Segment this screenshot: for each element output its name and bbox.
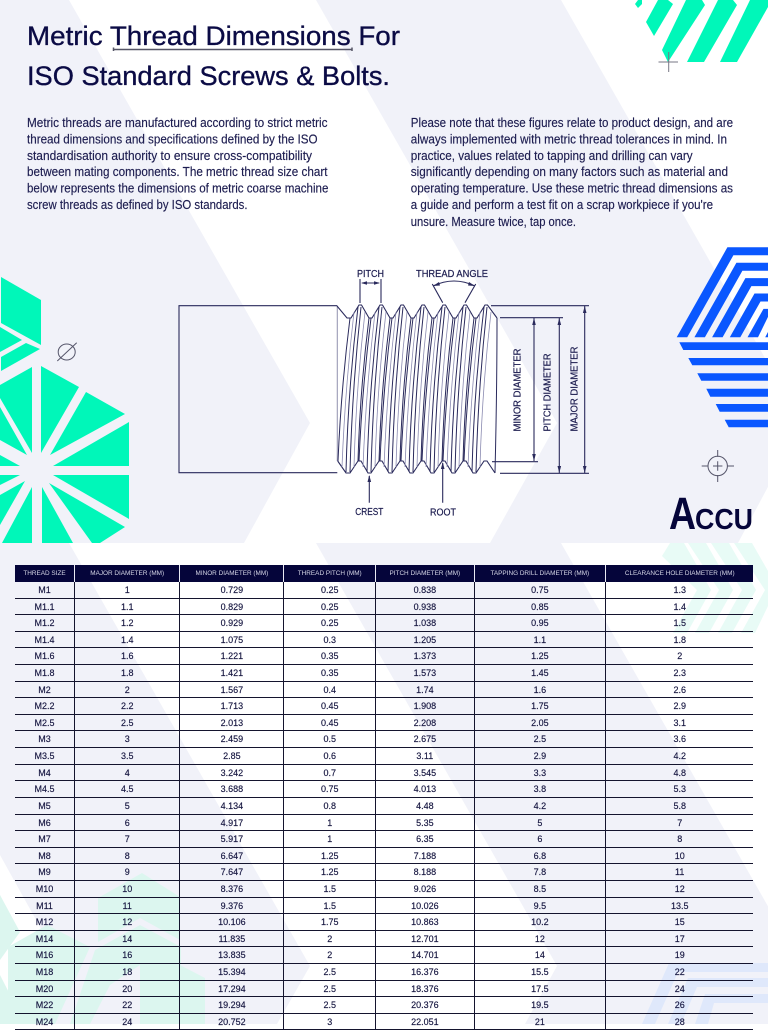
row M1.1	[15, 599, 753, 615]
faded mint hexagon	[0, 873, 205, 1024]
row M1.6: 1.6	[121, 651, 133, 661]
Accu logo	[669, 488, 753, 539]
row M24: 3	[327, 1017, 332, 1027]
title	[27, 21, 400, 91]
row M1: 1	[125, 585, 130, 595]
row M3.5: 3.11	[416, 751, 433, 761]
row M1.8: 1.421	[221, 668, 243, 678]
row M3: 3.6	[673, 734, 686, 744]
row M2: 0.4	[323, 685, 336, 695]
row M1: 0.729	[221, 585, 243, 595]
row M2: 1.567	[221, 685, 243, 695]
row M3.5: 3.5	[121, 751, 133, 761]
row M9: 7.647	[221, 867, 243, 877]
title: ISO Standard Screws & Bolts.	[27, 61, 390, 91]
row M3: 3	[125, 734, 130, 744]
row M9: 9	[125, 867, 130, 877]
row M18: 16.376	[411, 967, 439, 977]
row M9: 8.188	[414, 867, 436, 877]
row M1.1: M1.1	[34, 602, 54, 612]
row M16: 13.835	[218, 950, 246, 960]
row M7: 7	[125, 834, 130, 844]
row M6: M6	[38, 818, 51, 828]
row M1.8	[15, 665, 753, 682]
table header: THREAD SIZE	[23, 570, 66, 577]
row M24: 22.051	[411, 1017, 439, 1027]
crest and root leader lines	[369, 463, 443, 503]
row M9: 1.25	[321, 867, 338, 877]
row M2.5: 0.45	[321, 718, 338, 728]
row M2: M2	[38, 685, 51, 695]
row M10: M10	[36, 884, 53, 894]
diagram labels: MAJOR DIAMETER	[570, 346, 580, 432]
row M8: 6.647	[221, 851, 243, 861]
row M2.2	[15, 698, 753, 715]
row M20: 24	[675, 984, 685, 994]
row M7: 6	[537, 834, 542, 844]
row M18: 15.5	[531, 967, 549, 977]
row M2	[15, 682, 753, 698]
row M5: 0.8	[323, 801, 336, 811]
row M1.8: 2.3	[673, 668, 686, 678]
row M22: 22	[122, 1000, 132, 1010]
diagram labels: PITCH	[357, 269, 384, 280]
row M1.2: 1.5	[673, 618, 686, 628]
row M20: M20	[36, 984, 53, 994]
row M10: 12	[675, 884, 685, 894]
row M8: 7.188	[414, 851, 436, 861]
intro text right: practice, values related to tapping and drilling can vary	[411, 149, 693, 163]
table header: THREAD PITCH (MM)	[298, 570, 362, 577]
row M6: 6	[125, 818, 130, 828]
row M12: 10.2	[531, 917, 549, 927]
diagram labels: MINOR DIAMETER	[512, 348, 524, 432]
row M2: 2	[125, 685, 130, 695]
row M2.2: 0.45	[321, 701, 338, 711]
row M10: 10	[122, 884, 132, 894]
row M5: 5	[125, 801, 130, 811]
row M10: 8.5	[534, 884, 546, 894]
diagram labels	[355, 269, 580, 518]
row M1.4: 1.1	[534, 635, 546, 645]
row M10	[15, 881, 753, 898]
row M22: 26	[675, 1000, 685, 1010]
row M2.5: 2.208	[414, 718, 436, 728]
row M4.5: 0.75	[321, 784, 338, 794]
row M8: M8	[38, 851, 51, 861]
row M2.5: 2.013	[221, 718, 243, 728]
row M11: 11	[123, 901, 132, 911]
row M1: 1.3	[673, 585, 686, 595]
row M1.1: 0.25	[321, 602, 338, 612]
row M18: M18	[36, 967, 53, 977]
row M22: 2.5	[323, 1000, 336, 1010]
row M8: 6.8	[534, 851, 546, 861]
row M11: 9.376	[221, 901, 243, 911]
Accu logo: CCU	[695, 504, 753, 536]
row M2.5: 3.1	[673, 718, 686, 728]
intro text left: below represents the dimensions of metric coarse machine	[27, 182, 328, 196]
row M1.6: 1.373	[414, 651, 436, 661]
mint hexagon wheel left	[0, 277, 129, 543]
table header: PITCH DIAMETER (MM)	[390, 570, 460, 577]
row M1.4: 0.3	[323, 635, 336, 645]
dimension extension lines	[491, 306, 589, 473]
mint stripes top right	[635, 0, 768, 62]
thread angle bracket	[432, 281, 476, 303]
intro text left: standardisation authority to ensure cross-compatibility	[27, 149, 313, 163]
row M4: M4	[38, 768, 51, 778]
row M9: 7.8	[534, 867, 546, 877]
row M2: 1.74	[416, 685, 434, 695]
helix lines	[338, 307, 497, 473]
row M6: 1	[327, 818, 332, 828]
row M1.4: M1.4	[34, 635, 54, 645]
row M10: 8.376	[221, 884, 243, 894]
metric thread size table	[15, 565, 753, 1030]
row M1: M1	[38, 585, 51, 595]
row M20: 17.5	[531, 984, 549, 994]
row M2.2: M2.2	[34, 701, 54, 711]
row M3.5: 0.6	[323, 751, 336, 761]
row M16	[15, 947, 753, 964]
row M18: 15.394	[218, 967, 246, 977]
row M10: 1.5	[323, 884, 336, 894]
row M1.6: M1.6	[34, 651, 54, 661]
row M11: 9.5	[534, 901, 546, 911]
row M2.2: 1.713	[221, 701, 243, 711]
secondary helix lines	[342, 312, 491, 467]
row M1.2: 0.929	[221, 618, 243, 628]
row M1.8: 0.35	[321, 668, 338, 678]
row M1.4: 1.205	[414, 635, 436, 645]
row M14: 2	[327, 934, 332, 944]
row M5: 4.134	[221, 801, 243, 811]
row M24: M24	[36, 1017, 53, 1027]
row M2.5: M2.5	[34, 718, 54, 728]
row M3.5	[15, 748, 753, 765]
row M14: M14	[36, 934, 53, 944]
row M24: 24	[122, 1017, 132, 1027]
row M4.5: 3.8	[534, 784, 546, 794]
row M7: M7	[38, 834, 51, 844]
row M7: 5.917	[221, 834, 243, 844]
row M6: 5	[537, 818, 542, 828]
diagram labels: CREST	[355, 507, 383, 518]
row M9	[15, 864, 753, 881]
row M1.6: 2	[677, 651, 682, 661]
row M12: 10.106	[218, 917, 246, 927]
row M9: M9	[38, 867, 51, 877]
row M24: 21	[535, 1017, 545, 1027]
row M24: 28	[675, 1017, 685, 1027]
row M2: 2.6	[673, 685, 686, 695]
row M2.5: 2.05	[531, 718, 549, 728]
row M3: 2.5	[534, 734, 546, 744]
row M5: 4.2	[534, 801, 546, 811]
row M22: 19.294	[218, 1000, 246, 1010]
intro text left: Metric threads are manufactured according to strict metric	[27, 116, 328, 130]
title: Metric Thread Dimensions For	[27, 21, 400, 51]
row M3.5: 2.9	[534, 751, 546, 761]
row M1.2: 1.2	[121, 618, 133, 628]
row M1.6: 1.25	[531, 651, 549, 661]
row M18: 22	[675, 967, 685, 977]
intro text left: between mating components. The metric thread size chart	[27, 165, 328, 179]
row M1.6: 0.35	[321, 651, 338, 661]
row M3	[15, 731, 753, 748]
row M20: 17.294	[218, 984, 246, 994]
row M22: 20.376	[411, 1000, 439, 1010]
row M16: 19	[675, 950, 685, 960]
row M1.2	[15, 615, 753, 632]
row M1.4: 1.8	[673, 635, 686, 645]
row M14	[15, 931, 753, 947]
row M20: 20	[122, 984, 132, 994]
row M22: 19.5	[531, 1000, 549, 1010]
diagram labels: THREAD ANGLE	[416, 269, 488, 280]
row M24	[15, 1014, 753, 1030]
row M1.1: 0.829	[221, 602, 243, 612]
row M20	[15, 981, 753, 997]
row M1.2: 1.038	[414, 618, 436, 628]
target icon	[702, 450, 734, 482]
row M6: 5.35	[416, 818, 434, 828]
row M18: 2.5	[323, 967, 336, 977]
row M3: 0.5	[323, 734, 336, 744]
faded blue stripes	[642, 963, 768, 1024]
row M1.4: 1.075	[221, 635, 243, 645]
row M2.2: 2.9	[673, 701, 686, 711]
row M7: 1	[327, 834, 332, 844]
diagram labels: PITCH DIAMETER	[542, 354, 554, 432]
row M18: 18	[122, 967, 132, 977]
row M24: 20.752	[218, 1017, 246, 1027]
row M16: 2	[327, 950, 332, 960]
row M11: 1.5	[323, 901, 336, 911]
row M20: 18.376	[411, 984, 439, 994]
table header: MINOR DIAMETER (MM)	[196, 570, 268, 577]
row M1: 0.838	[414, 585, 436, 595]
shank end line	[336, 306, 338, 461]
row M3: M3	[38, 734, 51, 744]
intro text right: Please note that these figures relate to product design, and are	[411, 116, 733, 130]
row M3: 2.459	[221, 734, 243, 744]
row M4.5: 4.013	[414, 784, 436, 794]
row M12	[15, 914, 753, 931]
table header	[15, 565, 753, 582]
row M4: 4	[125, 768, 130, 778]
row M1.2: M1.2	[34, 618, 54, 628]
row M4: 4.8	[673, 768, 686, 778]
row M1.1: 0.85	[531, 602, 549, 612]
row M1: 0.25	[321, 585, 338, 595]
bottom thread profile	[338, 461, 495, 473]
thread diagram	[179, 279, 589, 503]
top thread profile	[337, 305, 497, 318]
row M5: M5	[38, 801, 51, 811]
row M4.5: 4.5	[121, 784, 133, 794]
faded mint chevrons	[662, 543, 768, 633]
row M2.5: 2.5	[121, 718, 133, 728]
row M16: 14	[535, 950, 545, 960]
row M16: M16	[36, 950, 53, 960]
row M2: 1.6	[534, 685, 546, 695]
intro text right: unsure. Measure twice, tap once.	[411, 215, 576, 229]
row M12: M12	[36, 917, 53, 927]
row M14: 11.835	[218, 934, 245, 944]
row M3: 2.675	[414, 734, 436, 744]
row M8	[15, 848, 753, 864]
row M11: 10.026	[411, 901, 439, 911]
row M22	[15, 997, 753, 1014]
row M8: 10	[675, 851, 685, 861]
row M1.6: 1.221	[221, 651, 243, 661]
diagram arrowheads	[361, 281, 586, 482]
row M22: M22	[36, 1000, 53, 1010]
row M1.4: 1.4	[121, 635, 133, 645]
row M1.8: 1.45	[531, 668, 549, 678]
intro text right: a guide and perform a test fit on a scrap workpiece if you're	[411, 198, 713, 212]
row M1: 0.75	[531, 585, 549, 595]
row M11: 13.5	[671, 901, 688, 911]
row M12: 1.75	[321, 917, 338, 927]
row M1.2: 0.25	[321, 618, 338, 628]
crosshair top right	[658, 52, 678, 72]
row M11	[15, 898, 753, 914]
row M1.1: 1.1	[121, 602, 133, 612]
row M4: 3.545	[414, 768, 436, 778]
pitch bracket	[360, 279, 381, 303]
row M1.4	[15, 632, 753, 648]
row M20: 2.5	[323, 984, 336, 994]
table header: CLEARANCE HOLE DIAMETER (MM)	[625, 570, 735, 577]
row M12: 15	[675, 917, 685, 927]
row M1.1: 1.4	[673, 602, 686, 612]
dimension arrow lines	[534, 306, 585, 473]
blue stripes graphic right	[677, 247, 768, 427]
row M10: 9.026	[414, 884, 436, 894]
intro text left: thread dimensions and specifications defined by the ISO	[27, 132, 318, 146]
row M1.8: 1.573	[414, 668, 436, 678]
row M16: 16	[122, 950, 132, 960]
row M8: 8	[125, 851, 130, 861]
row M1.8: M1.8	[34, 668, 54, 678]
row M7: 8	[677, 834, 682, 844]
row M5: 4.48	[416, 801, 434, 811]
row M2.5	[15, 715, 753, 731]
row M12: 12	[122, 917, 132, 927]
title underline	[114, 48, 352, 51]
row M6	[15, 815, 753, 831]
row M5: 5.8	[673, 801, 686, 811]
row M4.5: M4.5	[34, 784, 54, 794]
row M2.2: 1.75	[531, 701, 549, 711]
row M12: 10.863	[411, 917, 439, 927]
intro text right	[411, 116, 733, 229]
diameter symbol	[57, 343, 77, 361]
row M7	[15, 831, 753, 848]
Accu logo: A	[669, 488, 696, 539]
row M1.6	[15, 648, 753, 665]
diagram labels: ROOT	[430, 508, 456, 518]
row M4: 3.3	[534, 768, 546, 778]
row M14: 12.701	[411, 934, 439, 944]
row M2.2: 2.2	[121, 701, 133, 711]
row M1.2: 0.95	[531, 618, 549, 628]
row M4: 3.242	[221, 768, 243, 778]
row M5	[15, 798, 753, 815]
row M8: 1.25	[321, 851, 338, 861]
intro text left: screw threads as defined by ISO standards.	[27, 198, 248, 212]
row M4: 0.7	[323, 768, 336, 778]
row M16: 14.701	[411, 950, 439, 960]
row M4	[15, 765, 753, 781]
row M14: 14	[122, 934, 132, 944]
screw shank	[179, 306, 337, 473]
row M4.5: 5.3	[673, 784, 686, 794]
row M9: 11	[675, 867, 684, 877]
row M1	[15, 582, 753, 599]
table header: MAJOR DIAMETER (MM)	[90, 570, 164, 577]
intro text right: operating temperature. Use these metric thread dimensions as	[411, 182, 733, 196]
row M3.5: 4.2	[673, 751, 686, 761]
row M14: 12	[535, 934, 545, 944]
row M3.5: 2.85	[223, 751, 241, 761]
row M4.5: 3.688	[221, 784, 243, 794]
intro text left	[27, 116, 328, 212]
row M4.5	[15, 781, 753, 798]
row M6: 4.917	[221, 818, 243, 828]
row M6: 7	[677, 818, 682, 828]
row M1.1: 0.938	[414, 602, 436, 612]
table header: TAPPING DRILL DIAMETER (MM)	[490, 570, 589, 577]
row M7: 6.35	[416, 834, 434, 844]
intro text right: significantly depending on many factors such as material and	[411, 165, 728, 179]
row M2.2: 1.908	[414, 701, 436, 711]
row M1.8: 1.8	[121, 668, 133, 678]
row M14: 17	[675, 934, 685, 944]
intro text right: always implemented with metric thread tolerances in mind. In	[411, 132, 727, 146]
row M11: M11	[36, 901, 53, 911]
row M3.5: M3.5	[34, 751, 54, 761]
row M18	[15, 964, 753, 981]
